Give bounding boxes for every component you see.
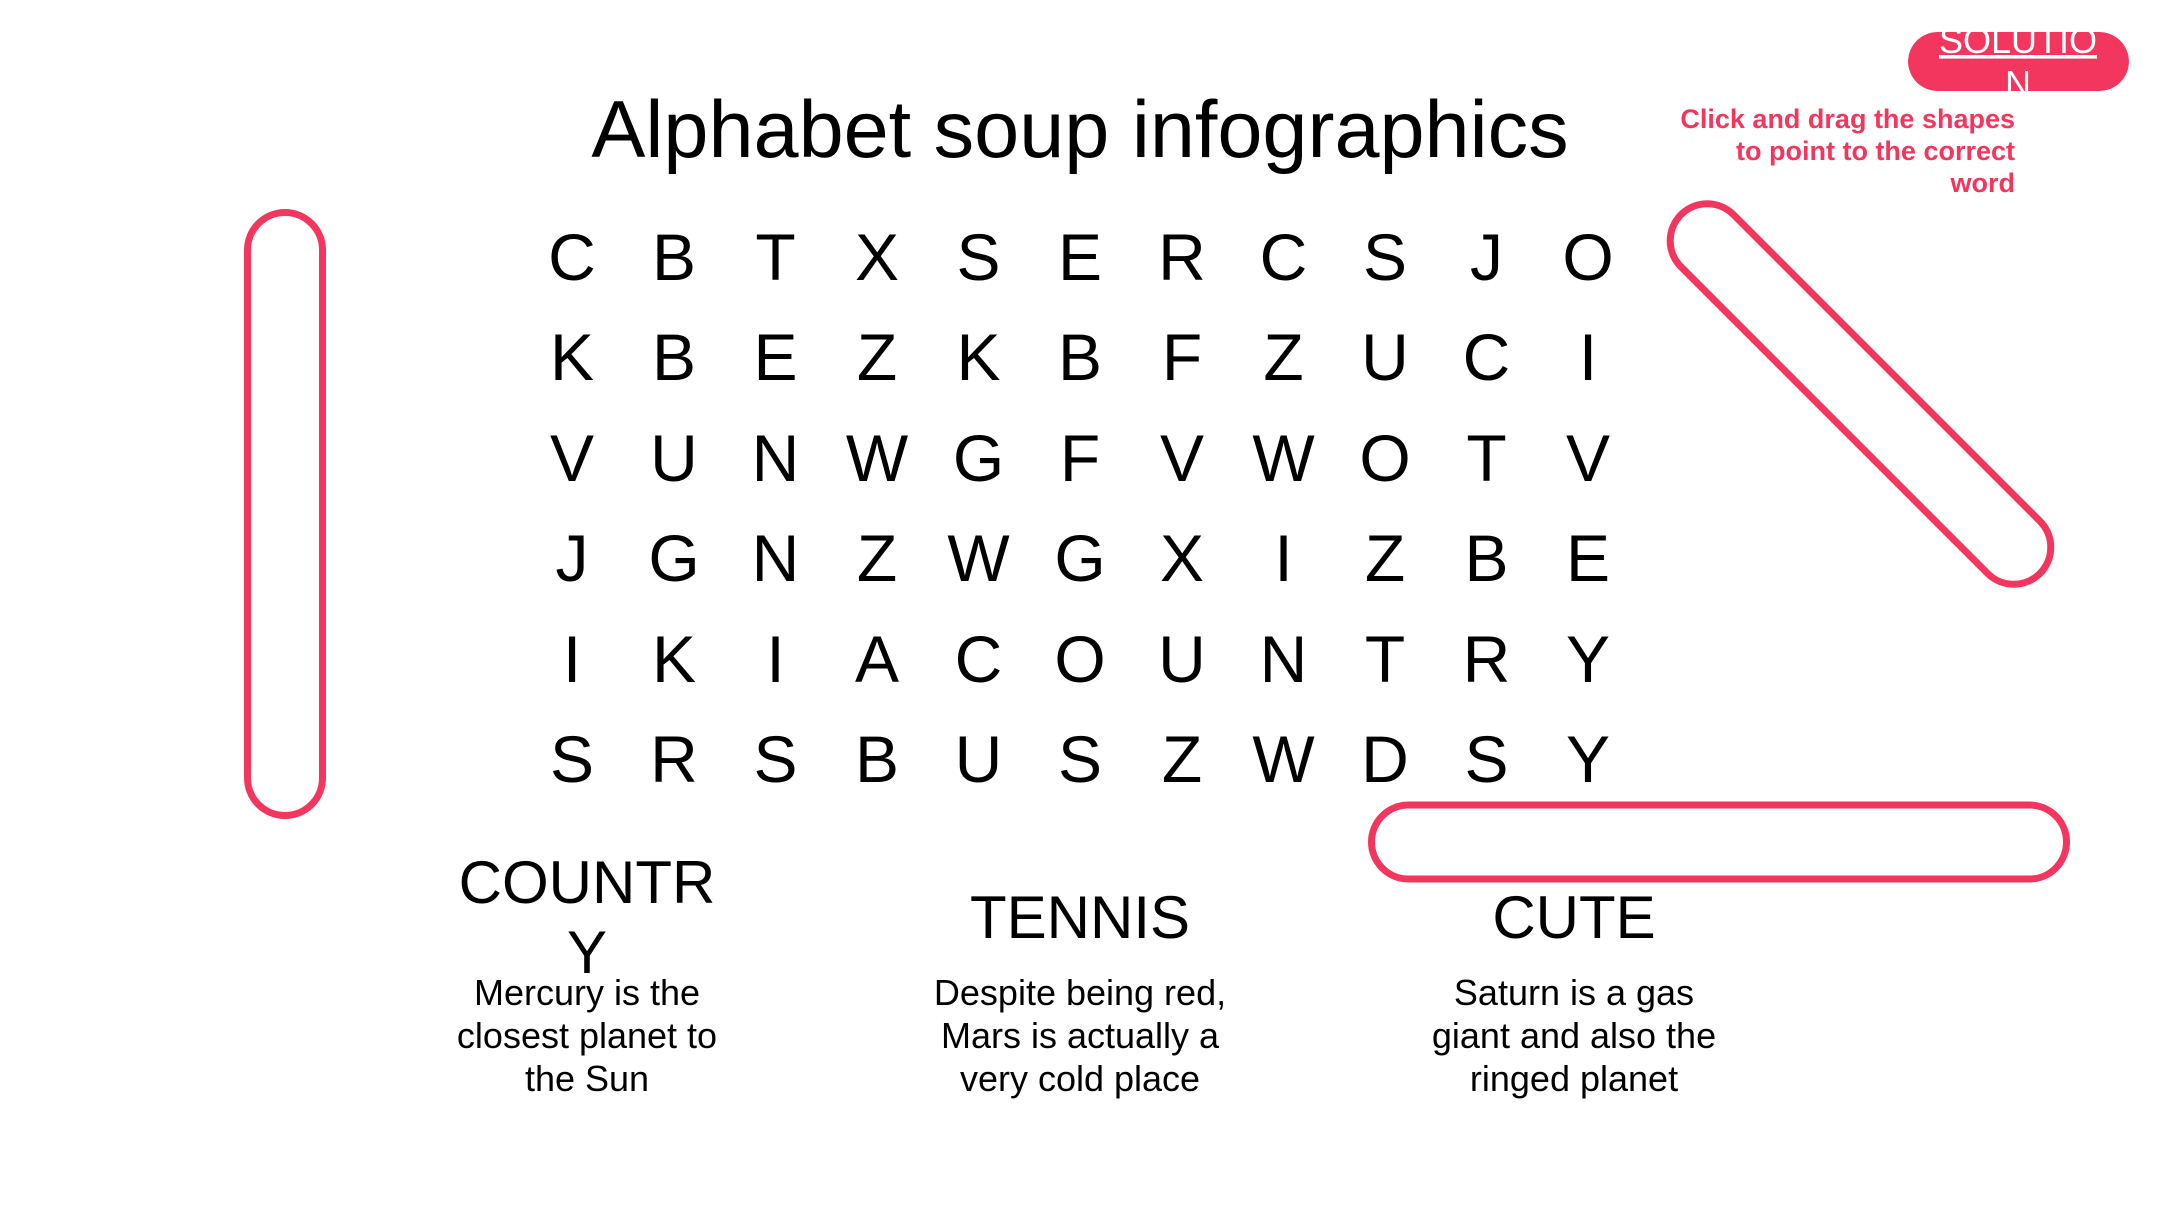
row 3: G bbox=[953, 421, 1004, 495]
row 4: E bbox=[1566, 521, 1610, 595]
row 1: O bbox=[1562, 220, 1614, 294]
description: saturn: giant and also the bbox=[1432, 1015, 1716, 1056]
row 6: Z bbox=[1162, 722, 1202, 796]
row 4: G bbox=[648, 521, 700, 595]
row 5: I bbox=[563, 622, 581, 696]
row 1: J bbox=[1470, 220, 1503, 294]
description: mercury: the Sun bbox=[525, 1058, 649, 1099]
row 3: W bbox=[846, 421, 909, 495]
row 3: F bbox=[1060, 421, 1100, 495]
row 4 bbox=[556, 521, 1610, 595]
instruction text: Click and drag the shapes bbox=[1680, 104, 2015, 134]
row 1: B bbox=[652, 220, 696, 294]
row 6: Y bbox=[1566, 722, 1610, 796]
row 3: N bbox=[752, 421, 799, 495]
row 5: U bbox=[1158, 622, 1206, 696]
row 2: K bbox=[956, 320, 1001, 394]
row 4: B bbox=[1464, 521, 1509, 595]
heading: country: COUNTR bbox=[459, 849, 715, 916]
selection pill: vertical bbox=[248, 212, 322, 816]
row 6: S bbox=[1464, 722, 1509, 796]
selection pill: diagonal bbox=[1655, 188, 2066, 600]
description: saturn: ringed planet bbox=[1470, 1058, 1678, 1099]
row 2: K bbox=[550, 320, 594, 394]
row 6 bbox=[550, 722, 1610, 796]
row 2: U bbox=[1361, 320, 1409, 394]
row 1: S bbox=[956, 220, 1001, 294]
row 2 bbox=[550, 320, 1597, 394]
row 4: G bbox=[1054, 521, 1106, 595]
solution button: N bbox=[2005, 63, 2031, 104]
description: mercury bbox=[457, 972, 717, 1099]
row 3: W bbox=[1252, 421, 1315, 495]
solution button bbox=[1908, 32, 2129, 91]
row 5: O bbox=[1054, 622, 1106, 696]
row 2: F bbox=[1162, 320, 1202, 394]
row 5: Y bbox=[1566, 622, 1610, 696]
title: Alphabet soup infographics bbox=[591, 85, 1569, 175]
description: mercury: closest planet to bbox=[457, 1015, 717, 1056]
row 3: V bbox=[1566, 421, 1610, 495]
description: mars: Despite being red, bbox=[934, 972, 1226, 1013]
row 6: S bbox=[753, 722, 798, 796]
row 6: S bbox=[550, 722, 594, 796]
instruction text: to point to the correct bbox=[1736, 136, 2015, 166]
row 6: R bbox=[650, 722, 698, 796]
row 6: S bbox=[1058, 722, 1102, 796]
row 2: B bbox=[1058, 320, 1102, 394]
row 4: W bbox=[947, 521, 1010, 595]
heading: cute: CUTE bbox=[1492, 884, 1656, 951]
row 6: D bbox=[1361, 722, 1409, 796]
row 2: Z bbox=[857, 320, 897, 394]
description: saturn bbox=[1432, 972, 1716, 1099]
row 2: B bbox=[652, 320, 696, 394]
word block: cute bbox=[1432, 884, 1716, 1099]
heading: country bbox=[459, 849, 715, 986]
selection pill: horizontal bbox=[1372, 805, 2066, 879]
solution button: SOLUTIO bbox=[1939, 20, 2097, 61]
instruction text bbox=[1680, 104, 2015, 198]
row 3: T bbox=[1466, 421, 1507, 495]
description: mars: Mars is actually a bbox=[941, 1015, 1220, 1056]
row 1: R bbox=[1158, 220, 1206, 294]
description: mars bbox=[934, 972, 1226, 1099]
row 5: R bbox=[1463, 622, 1510, 696]
word search grid bbox=[548, 220, 1614, 796]
description: mercury: Mercury is the bbox=[474, 972, 700, 1013]
row 1: X bbox=[855, 220, 899, 294]
row 3: U bbox=[650, 421, 698, 495]
row 1: C bbox=[1260, 220, 1307, 294]
row 1: S bbox=[1363, 220, 1407, 294]
row 4: I bbox=[1274, 521, 1293, 595]
row 1: E bbox=[1058, 220, 1102, 294]
row 6: W bbox=[1252, 722, 1315, 796]
row 3: V bbox=[550, 421, 594, 495]
description: saturn: Saturn is a gas bbox=[1454, 972, 1694, 1013]
row 5: I bbox=[766, 622, 785, 696]
row 1: C bbox=[548, 220, 596, 294]
row 1 bbox=[548, 220, 1614, 294]
row 4: J bbox=[556, 521, 588, 595]
row 2: Z bbox=[1263, 320, 1304, 394]
row 2: E bbox=[753, 320, 798, 394]
row 3 bbox=[550, 421, 1610, 495]
word block: country bbox=[457, 849, 717, 1099]
row 2: I bbox=[1579, 320, 1597, 394]
row 5 bbox=[563, 622, 1610, 696]
heading: tennis: TENNIS bbox=[970, 884, 1190, 951]
row 6: U bbox=[955, 722, 1002, 796]
row 4: Z bbox=[1365, 521, 1405, 595]
row 5: A bbox=[855, 622, 899, 696]
row 6: B bbox=[855, 722, 899, 796]
row 4: X bbox=[1160, 521, 1204, 595]
row 5: K bbox=[652, 622, 696, 696]
row 5: C bbox=[955, 622, 1002, 696]
row 5: N bbox=[1260, 622, 1307, 696]
row 5: T bbox=[1365, 622, 1405, 696]
row 3: O bbox=[1359, 421, 1411, 495]
instruction text: word bbox=[1950, 168, 2015, 198]
word block: tennis bbox=[934, 884, 1226, 1099]
row 3: V bbox=[1160, 421, 1204, 495]
row 4: N bbox=[752, 521, 799, 595]
heading: country: Y bbox=[567, 919, 607, 986]
description: mars: very cold place bbox=[960, 1058, 1200, 1099]
row 4: Z bbox=[857, 521, 897, 595]
row 2: C bbox=[1463, 320, 1510, 394]
row 1: T bbox=[755, 220, 796, 294]
